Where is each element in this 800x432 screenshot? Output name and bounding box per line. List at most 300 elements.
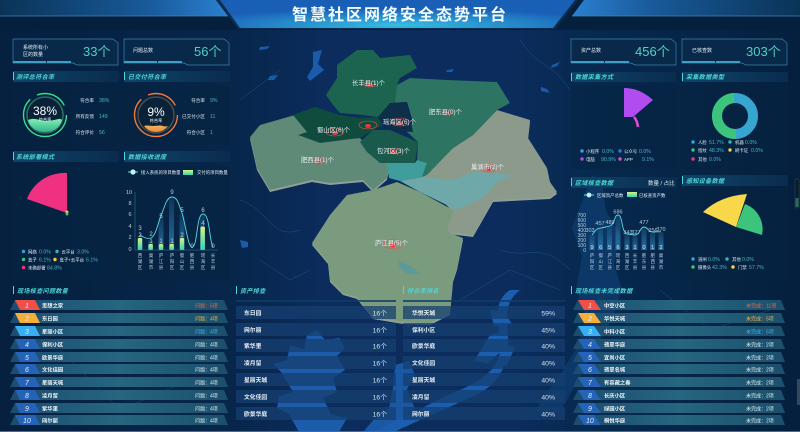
row 7 <box>573 377 785 387</box>
row 8: 8 <box>25 393 29 400</box>
row 1: 1 <box>588 303 592 310</box>
chart legend <box>584 192 666 199</box>
scrollbar: right panel <box>795 179 799 208</box>
value labels: 2 <box>138 233 142 239</box>
legend: 数据采集方式: 0.0% <box>639 149 651 155</box>
axis labels: 700 <box>578 213 586 219</box>
table: 资产排查 <box>236 300 396 420</box>
bar counts <box>590 245 663 251</box>
stat card: 资产总数: 456个 <box>635 44 670 59</box>
row 9: 绿园小区 <box>604 404 626 412</box>
row <box>403 339 565 352</box>
row: 东日园 <box>244 309 262 317</box>
row 1 <box>10 300 228 310</box>
value labels: 343 <box>623 230 633 236</box>
heading: 已交付符合率: 已交付符合率 <box>128 73 167 81</box>
category labels: 区 <box>170 265 175 270</box>
district labels: 肥西县(1)个 <box>301 156 335 164</box>
axis labels: 500 <box>578 223 586 229</box>
category labels: 西 <box>650 259 655 265</box>
value labels: 5 <box>180 208 184 214</box>
heading: 采集数据类型: 采集数据类型 <box>686 73 725 81</box>
category labels: 海 <box>616 258 621 265</box>
ranking list: 现场核查未完成数据 <box>573 300 785 425</box>
row: 16个 <box>373 342 387 350</box>
pie chart: 系统部署模式 <box>13 166 118 280</box>
water: 巢湖 <box>387 160 427 181</box>
row: 文化佳园 <box>412 359 435 367</box>
row 5: 问题：4项 <box>195 354 218 362</box>
chart legend: 区域资产总数 <box>597 192 624 199</box>
category labels: 巢 <box>659 252 664 259</box>
category labels: 长 <box>211 252 216 259</box>
legend: 采集数据类型: 指纹 <box>698 147 707 154</box>
row: 文化佳园 <box>244 393 267 401</box>
legend: 感知设备数据: 42.3% <box>712 265 727 271</box>
row: 欧景华庭 <box>244 410 267 418</box>
legend: 系统部署模式 <box>22 248 98 272</box>
legend: 感知设备数据: 道闸 <box>698 256 707 263</box>
category labels: 丰 <box>211 258 216 265</box>
bar counts: 3 <box>625 245 629 251</box>
row 1: 问题：5项 <box>195 302 218 310</box>
row 7: 未完成：2项 <box>746 380 774 386</box>
bar counts: 2 <box>659 245 663 251</box>
legend: 采集数据类型: 48.3% <box>709 148 724 154</box>
category labels: 湖 <box>149 258 154 265</box>
bottom edge strip <box>0 431 800 432</box>
row 7: 问题：4项 <box>195 380 218 386</box>
legend: 系统部署模式: 盒子+云平台 <box>60 256 85 264</box>
heading: 已交付符合率 <box>124 71 230 82</box>
category labels: 肥 <box>190 253 195 259</box>
value labels: 303 <box>585 228 595 234</box>
legend: 采集数据类型: 0.0% <box>745 140 757 146</box>
legend: 感知设备数据: 其他 <box>732 256 741 263</box>
row 6 <box>10 364 228 374</box>
county markers <box>312 81 498 249</box>
bar counts: 6 <box>599 245 602 251</box>
row 3: 未完成：5项 <box>746 328 774 336</box>
category labels: 湖 <box>659 258 664 265</box>
row 5 <box>10 352 228 362</box>
gauge panel: 已交付符合率: 1 <box>210 130 213 136</box>
stat card: 资产总数 <box>571 39 676 65</box>
row: 16个 <box>373 360 387 368</box>
row 9: 未完成：2项 <box>746 406 774 412</box>
row 7: 有容藏之春 <box>604 378 631 386</box>
row <box>403 323 565 336</box>
gauge panel: 测评总符合率: 38% <box>99 98 110 104</box>
legend: 采集数据类型: 机器 <box>735 139 744 146</box>
gauge panel: 已交付符合率 <box>124 86 230 145</box>
value labels: 489 <box>605 220 615 226</box>
row 1: 思想之家 <box>42 302 64 310</box>
legend: 采集数据类型: 0.0% <box>709 157 721 163</box>
water: lake east <box>400 172 513 210</box>
gauge panel: 测评总符合率: 符合率 <box>80 97 94 104</box>
legend: 数据采集方式: 公众号 <box>624 149 638 155</box>
district: 包河区 <box>360 130 418 163</box>
category labels: 西 <box>625 253 630 259</box>
row: 欧景华庭 <box>412 342 435 350</box>
category labels <box>590 252 664 271</box>
heading: 符合率排名 <box>403 286 440 295</box>
gauge panel: 已交付符合率: 11 <box>210 114 215 120</box>
heading: 现场核查未完成数据 <box>571 286 633 295</box>
heading: 系统部署模式 <box>13 151 118 162</box>
axis: 0 <box>128 247 132 253</box>
title <box>220 0 575 28</box>
row 1 <box>573 300 785 310</box>
gauge panel: 测评总符合率: 38% <box>33 104 57 118</box>
value labels: 0 <box>211 244 215 250</box>
row <box>236 373 396 386</box>
chart legend <box>128 169 228 176</box>
row <box>236 339 396 352</box>
category labels: 阳 <box>590 258 595 265</box>
heading: 测评总符合率 <box>13 71 118 82</box>
row 1: 1 <box>25 303 29 310</box>
legend: 数据采集方式: 0.0% <box>602 149 614 155</box>
row 5: 宜尚小区 <box>604 354 626 362</box>
row 7: 7 <box>588 380 593 387</box>
stat card: 已核查数: 303个 <box>746 44 781 59</box>
row 10: 问题：4项 <box>195 418 218 424</box>
category labels: 山 <box>598 258 603 265</box>
header bands <box>0 0 800 30</box>
row: 40% <box>541 412 555 418</box>
row <box>403 306 565 319</box>
heading: 区域核查数据 <box>571 177 677 188</box>
category labels: 丰 <box>633 258 638 265</box>
map 3D edge <box>250 112 557 325</box>
row 4: 4 <box>25 342 29 349</box>
district labels: 长丰县(1)个 <box>352 78 386 87</box>
category labels: 区 <box>180 265 185 270</box>
row 10: 未完成：2项 <box>746 418 774 424</box>
bar counts: 1 <box>651 245 654 251</box>
value labels: 1 <box>170 239 174 245</box>
row 9: 9 <box>25 406 29 413</box>
row 5: 5 <box>25 355 29 362</box>
category labels: 市 <box>149 264 154 271</box>
row 10: 10 <box>23 418 31 425</box>
legend: 系统部署模式: 84.8% <box>47 266 62 272</box>
stat card: 小区数量: 系统所有小 <box>23 44 48 51</box>
bar counts: 9 <box>590 245 594 251</box>
heading: 系统部署模式: 系统部署模式 <box>16 153 55 161</box>
heading: 数据采集方式 <box>571 72 676 82</box>
district labels: 蜀山区(6)个 <box>317 125 351 134</box>
legend: 感知设备数据 <box>691 256 764 271</box>
row: 16个 <box>373 376 387 384</box>
row 8: 8 <box>588 393 592 400</box>
category labels: 蜀 <box>598 253 603 259</box>
row 3: 3 <box>25 329 29 336</box>
category labels: 区 <box>138 265 143 270</box>
row 1: 中空小区 <box>604 302 626 310</box>
map of districts <box>250 50 557 325</box>
category labels: 县 <box>159 265 164 271</box>
value labels <box>585 210 666 236</box>
rose chart: 感知设备数据 <box>682 188 788 280</box>
row 3: 星丽小区 <box>42 328 64 336</box>
row <box>403 373 565 386</box>
row 6: 翡翠名城 <box>604 366 626 374</box>
stat card: 已核查数: 已核查数 <box>692 47 712 54</box>
value labels: 686 <box>613 210 623 216</box>
district: 长丰县 <box>326 50 417 117</box>
row 6 <box>573 364 785 374</box>
category labels: 县 <box>633 265 638 271</box>
legend: 系统部署模式: 6.1% <box>86 258 98 264</box>
row: 16个 <box>373 326 387 334</box>
row 8: 长庆小区 <box>604 392 626 400</box>
bar counts: 6 <box>616 245 620 251</box>
row: 网尔丽 <box>244 326 262 334</box>
legend: 采集数据类型: 其他 <box>698 156 707 163</box>
row <box>236 323 396 336</box>
category labels: 区 <box>625 265 630 270</box>
category labels: 县 <box>211 265 216 271</box>
district labels: 巢湖市(2)个 <box>471 162 505 171</box>
legend: 数据采集方式: 小程序 <box>586 148 600 155</box>
chart legend: 接入系统的项目数量 <box>141 169 181 176</box>
row 1: 未完成：11项 <box>746 302 776 310</box>
row 8: 凌月留 <box>42 392 58 400</box>
table: 符合率排名 <box>403 300 565 420</box>
rose chart: 数据采集方式 <box>571 85 676 169</box>
row 4: 未完成：2项 <box>746 342 774 348</box>
value labels: 1 <box>149 239 153 245</box>
chart legend: 已核查资产数 <box>639 192 666 199</box>
legend: 采集数据类型: 刷卡证 <box>735 147 749 154</box>
gauge panel: 测评总符合率: 所有反馈 <box>76 113 94 120</box>
value labels: 5 <box>159 214 163 220</box>
heading: 现场核查未完成数据: 现场核查未完成数据 <box>575 287 633 295</box>
axis labels: 600 <box>578 218 586 224</box>
row: 保利小区 <box>412 326 435 334</box>
bar counts: 0 <box>642 245 646 251</box>
row 2: 2 <box>587 316 592 323</box>
value labels <box>138 190 215 250</box>
row: 40% <box>541 394 555 402</box>
row 9: 问题：4项 <box>195 406 218 412</box>
category labels: 蜀 <box>180 253 185 259</box>
row 10 <box>573 415 785 425</box>
donut chart: 采集数据类型 <box>682 85 788 169</box>
category labels: 区 <box>598 265 603 270</box>
category labels: 庐 <box>159 252 164 259</box>
value labels: 2 <box>149 232 153 238</box>
legend: 采集数据类型: 51.7% <box>709 140 724 146</box>
row: 华悦天城 <box>412 309 435 317</box>
axis labels <box>578 213 586 254</box>
value labels: 327 <box>631 230 641 236</box>
row 2: 华悦天城 <box>604 314 626 322</box>
row 8: 未完成：2项 <box>746 392 774 400</box>
axis: 6 <box>128 212 132 218</box>
row 9: 紫华里 <box>42 404 59 412</box>
row 10: 10 <box>586 418 594 425</box>
category labels: 东 <box>642 258 647 264</box>
gauge panel: 测评总符合率 <box>13 86 118 145</box>
stat card: 小区数量: 33个 <box>83 44 110 59</box>
legend: 数据采集方式: 9.1% <box>642 157 654 163</box>
category labels: 县 <box>650 265 655 271</box>
value labels: 2 <box>180 233 184 239</box>
row 4: 翡翠华庭 <box>604 340 626 348</box>
value labels: 4 <box>201 221 205 227</box>
row: 凌月留 <box>244 359 262 367</box>
line <box>592 215 661 235</box>
value labels: 457 <box>595 221 605 227</box>
category labels: 瑶 <box>201 252 206 259</box>
legend: 数据采集方式 <box>580 148 654 163</box>
row 3 <box>573 326 785 336</box>
scrollbar: lower right <box>797 379 800 405</box>
gauge panel: 测评总符合率: 符合评价 <box>76 129 94 136</box>
category labels: 巢 <box>149 252 154 259</box>
row 10: 网尔丽 <box>42 416 59 424</box>
legend: 系统部署模式: 云平台 <box>62 248 75 256</box>
axis <box>126 190 218 253</box>
row 4 <box>573 339 785 349</box>
row <box>403 390 565 403</box>
row: 紫华里 <box>244 342 262 350</box>
row 5: 欧景华庭 <box>42 354 64 362</box>
legend: 感知设备数据: 0.0% <box>742 257 754 263</box>
axis labels: 100 <box>578 243 586 249</box>
district labels: 肥东县(0)个 <box>429 107 463 116</box>
row: 40% <box>541 360 555 368</box>
legend: 感知设备数据: 57.7% <box>749 265 764 271</box>
category labels: 瑶 <box>616 252 621 259</box>
row 2: 东日园 <box>42 314 58 322</box>
row <box>236 306 396 319</box>
legend: 系统部署模式: 0.0% <box>39 250 51 256</box>
row 3 <box>10 326 228 336</box>
heading: 测评总符合率: 测评总符合率 <box>16 73 55 81</box>
value labels: 477 <box>639 220 649 226</box>
line <box>140 197 213 247</box>
category labels: 肥 <box>650 253 655 259</box>
district: 庐江县 <box>312 182 463 323</box>
legend: 感知设备数据: 门禁 <box>738 264 747 271</box>
category labels: 山 <box>180 258 185 265</box>
row 7: 星丽天城 <box>42 378 64 386</box>
row <box>236 407 396 420</box>
district: 巢湖市 <box>422 110 557 235</box>
legend: 系统部署模式: 6.1% <box>39 258 51 264</box>
legend: 感知设备数据: 0.0% <box>708 257 720 263</box>
category labels: 庐 <box>170 252 175 259</box>
stat card: 问题总数 <box>124 39 229 65</box>
category labels: 湖 <box>138 258 143 265</box>
legend: 采集数据类型: 0.0% <box>751 148 763 154</box>
heading: 符合率排名: 符合率排名 <box>407 287 440 295</box>
row 8: 问题：4项 <box>195 392 218 400</box>
category labels: 江 <box>159 258 164 265</box>
row 3: 3 <box>588 329 592 336</box>
heading: 数据接收进度 <box>124 151 230 162</box>
title: 智慧社区网络安全态势平台 <box>292 5 508 24</box>
row 7 <box>10 377 228 387</box>
row 8 <box>573 390 785 400</box>
stat card: 已核查数 <box>682 39 787 65</box>
district labels: 包河区(3)个 <box>377 146 411 155</box>
value labels: 6 <box>201 208 205 214</box>
axis: 4 <box>128 224 132 230</box>
row 2 <box>573 313 785 323</box>
heading: 采集数据类型 <box>682 72 788 82</box>
legend: 系统部署模式: 网络 <box>28 248 37 256</box>
bars <box>138 198 205 250</box>
water: small lake <box>398 260 420 274</box>
combo chart: 数据接收进度 <box>124 166 230 280</box>
gauge panel: 已交付符合率: 符合率 <box>191 97 205 104</box>
category labels: 县 <box>607 265 612 271</box>
row 4: 4 <box>588 342 592 349</box>
stat card: 资产总数: 资产总数 <box>581 47 601 54</box>
category labels: 区 <box>616 265 621 270</box>
row 2: 2 <box>24 316 29 323</box>
row 5: 未完成：2项 <box>746 354 774 362</box>
category labels: 海 <box>201 258 206 265</box>
row: 40% <box>541 344 555 350</box>
row 10: 桐悦华庭 <box>604 416 626 424</box>
heading: 现场核查问题数量 <box>13 286 69 295</box>
gauge panel: 测评总符合率: 符合率 <box>39 116 51 123</box>
gauge panel: 已交付符合率: 符合率 <box>150 117 162 124</box>
bar counts: 1 <box>633 245 637 251</box>
row 7: 7 <box>25 380 30 387</box>
row 2: 问题：4项 <box>195 316 218 322</box>
legend: 数据采集方式: APP <box>624 157 633 162</box>
district: 肥东县 <box>390 78 510 177</box>
row <box>403 356 565 369</box>
row: 40% <box>541 378 555 384</box>
row 6: 6 <box>588 367 592 374</box>
category labels: 区 <box>201 265 206 270</box>
row 5 <box>573 352 785 362</box>
row 9: 9 <box>588 406 592 413</box>
row: 网尔丽 <box>412 410 430 418</box>
category labels: 西 <box>190 259 195 265</box>
category labels: 长 <box>633 252 638 259</box>
category labels: 肥 <box>642 253 647 259</box>
row 9 <box>573 403 785 413</box>
row 4 <box>10 339 228 349</box>
row 9 <box>10 403 228 413</box>
row: 凌月留 <box>412 393 430 401</box>
value labels: 1 <box>159 239 163 245</box>
bars <box>590 215 664 250</box>
category labels <box>138 252 216 271</box>
heading: 资产排查 <box>236 286 266 295</box>
axis: 2 <box>128 235 132 241</box>
legend: 系统部署模式: 盒子 <box>28 256 37 262</box>
legend: 数据采集方式: 90.9% <box>601 157 616 163</box>
row: 星丽天城 <box>412 376 435 384</box>
bar counts: 5 <box>608 245 611 251</box>
legend: 采集数据类型: 人脸 <box>698 139 707 146</box>
combo chart: 区域核查数据 <box>578 192 666 271</box>
category labels: 庐 <box>590 252 595 259</box>
value labels: 3 <box>138 226 142 232</box>
gauge panel: 已交付符合率: 9% <box>210 98 218 104</box>
